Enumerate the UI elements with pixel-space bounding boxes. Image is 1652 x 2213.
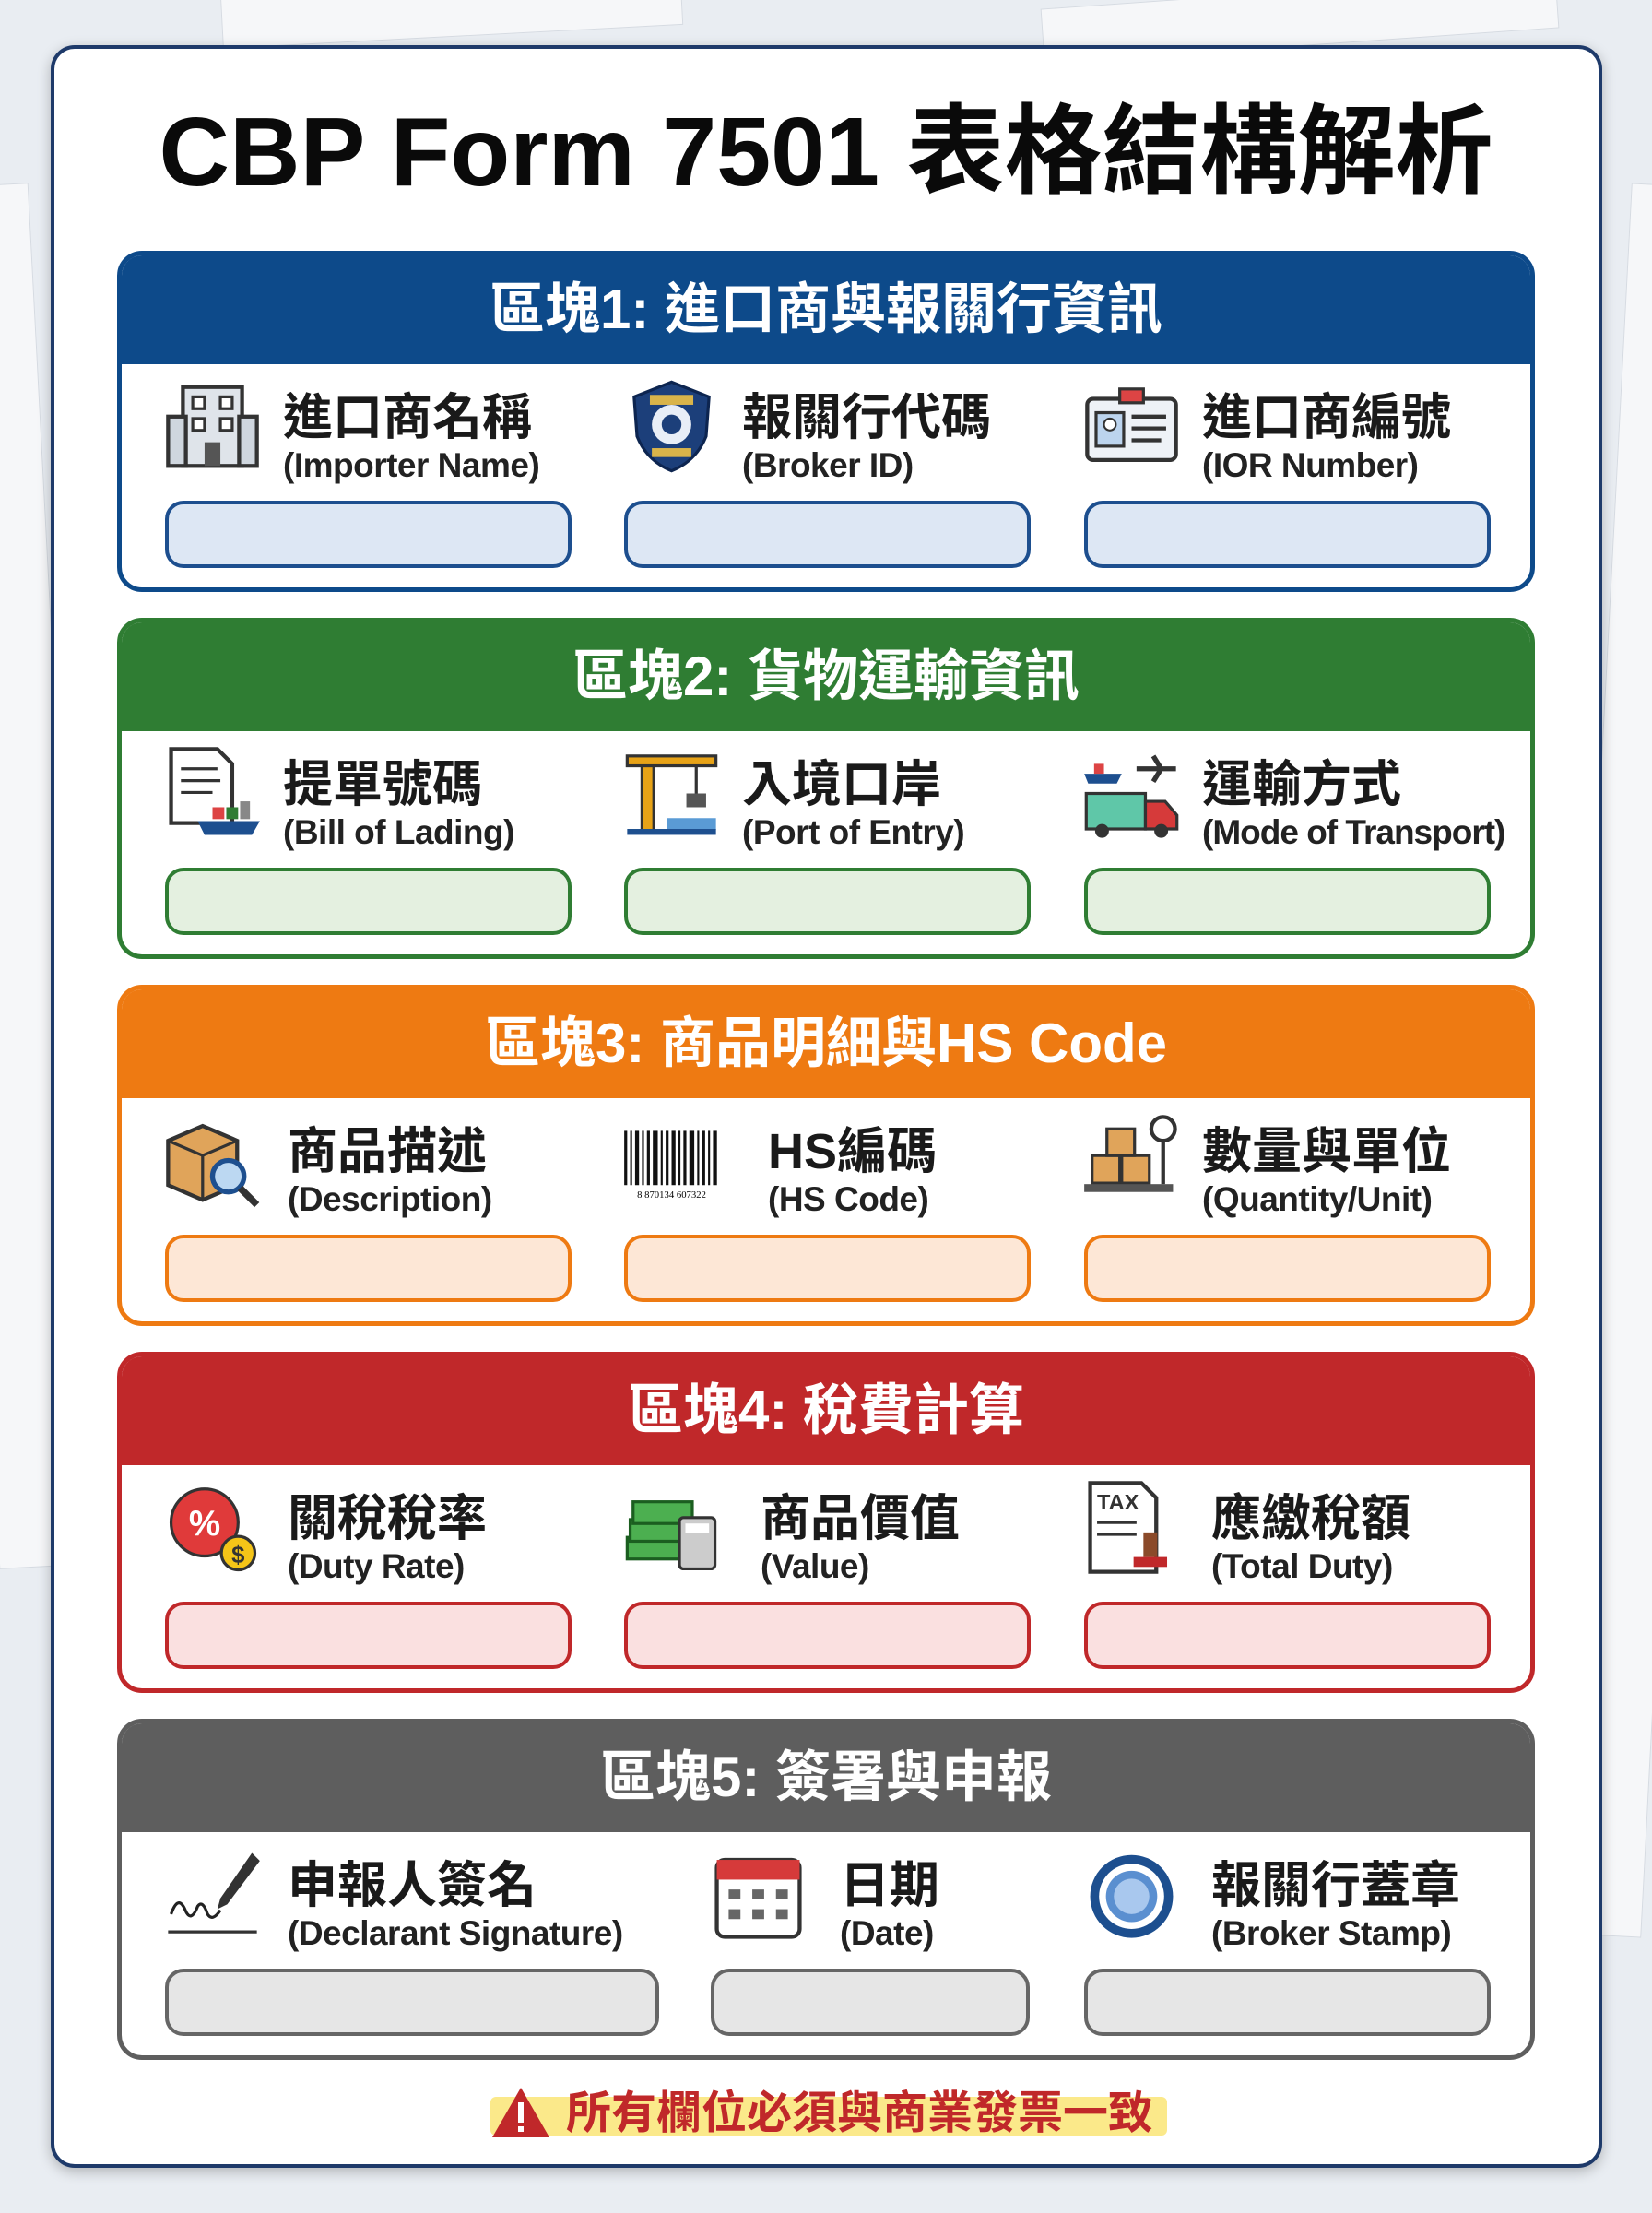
field: port of entry	[624, 754, 1031, 935]
heading: block 2: 區塊2: 貨物運輸資訊	[572, 645, 1080, 707]
panel: block 2 shipping	[117, 618, 1535, 959]
field: declarant signature	[165, 1853, 659, 2036]
field: value: (Value)	[761, 1547, 869, 1585]
field: total duty: (Total Duty)	[1211, 1547, 1393, 1585]
field: description: 商品描述	[288, 1124, 487, 1179]
field: description: (Description)	[288, 1180, 492, 1218]
heading: block 5: 區塊5: 簽署與申報	[600, 1746, 1052, 1808]
field: HS code	[624, 1124, 1031, 1302]
field: duty rate: (Duty Rate)	[288, 1547, 465, 1585]
field: date	[711, 1857, 1030, 2036]
field: total duty: 應繳稅額	[1211, 1491, 1410, 1546]
heading: block 4	[122, 1356, 1530, 1465]
field: value: 商品價值	[761, 1491, 960, 1546]
field: mode of transport: 運輸方式	[1202, 757, 1401, 812]
icon: percent badge	[170, 1487, 256, 1571]
heading: block 1	[122, 255, 1530, 364]
field: port of entry: (Port of Entry)	[742, 813, 964, 851]
title: CBP Form 7501 表格結構解析	[159, 98, 1493, 207]
icon: box with magnifier	[166, 1123, 260, 1208]
field: broker stamp: (Broker Stamp)	[1211, 1914, 1451, 1952]
icon: tax document and stamp: TAX	[1097, 1490, 1139, 1514]
icon: stamp seal	[1090, 1855, 1173, 1938]
heading: block 3	[122, 989, 1530, 1098]
field: mode of transport	[1084, 754, 1504, 935]
field: date: (Date)	[840, 1914, 934, 1952]
panel: block 4 duty	[117, 1352, 1535, 1693]
heading: block 2	[122, 622, 1530, 731]
field: broker stamp: 報關行蓋章	[1211, 1858, 1460, 1913]
heading: block 3: 區塊3: 商品明細與HS Code	[485, 1012, 1167, 1074]
icon: document with ship	[169, 747, 260, 835]
icon: building	[166, 385, 259, 468]
field: broker ID: (Broker ID)	[742, 446, 914, 484]
field: importer name	[165, 385, 572, 568]
field: broker ID	[624, 380, 1031, 568]
field: mode of transport: (Mode of Transport)	[1202, 813, 1504, 851]
field: port of entry: 入境口岸	[742, 757, 941, 812]
field: value	[624, 1491, 1031, 1669]
callout: footer warning: 所有欄位必須與商業發票一致	[566, 2089, 1153, 2138]
panel: block 1 importer & broker	[117, 251, 1535, 592]
field: HS code: (HS Code)	[768, 1180, 928, 1218]
field: broker ID: 報關行代碼	[742, 390, 991, 445]
heading: block 4: 區塊4: 稅費計算	[628, 1379, 1024, 1441]
icon: percent badge: $	[231, 1543, 244, 1568]
field: duty rate	[165, 1487, 572, 1669]
icon: badge	[632, 380, 711, 472]
icon: money and calculator	[625, 1500, 717, 1570]
field: HS code: HS編碼	[768, 1124, 937, 1179]
field: importer name: (Importer Name)	[283, 446, 539, 484]
field: quantity unit: 數量與單位	[1202, 1124, 1451, 1179]
heading: block 1: 區塊1: 進口商與報關行資訊	[490, 278, 1162, 340]
heading: block 5	[122, 1723, 1530, 1832]
field: description	[165, 1123, 572, 1302]
field: bill of lading: 提單號碼	[283, 757, 482, 812]
field: declarant signature: 申報人簽名	[288, 1858, 537, 1913]
panel: block 3 goods	[117, 985, 1535, 1326]
icon: barcode	[624, 1130, 717, 1201]
panel: block 5 signature	[117, 1719, 1535, 2060]
field: broker stamp	[1084, 1855, 1491, 2036]
icon: crane	[625, 754, 717, 835]
field: declarant signature: (Declarant Signature)	[288, 1914, 623, 1952]
field: IOR number: 進口商編號	[1202, 390, 1451, 445]
field: duty rate: 關稅稅率	[288, 1491, 487, 1546]
icon: barcode: 8 870134 607322	[637, 1189, 706, 1201]
field: quantity unit: (Quantity/Unit)	[1202, 1180, 1432, 1218]
icon: tax document and stamp	[1088, 1481, 1167, 1574]
icon: ID card	[1085, 387, 1178, 462]
icon: calendar	[714, 1857, 802, 1939]
field: bill of lading	[165, 747, 572, 935]
field: total duty	[1084, 1481, 1491, 1669]
icon: percent badge: %	[189, 1504, 220, 1544]
icon: boxes on scale	[1084, 1115, 1177, 1192]
icon: warning triangle	[492, 2088, 549, 2137]
icon: truck, ship, plane	[1084, 754, 1178, 838]
icon: pen signature	[168, 1853, 260, 1934]
field: importer name: 進口商名稱	[283, 390, 532, 445]
field: IOR number	[1084, 387, 1491, 568]
field: IOR number: (IOR Number)	[1202, 446, 1418, 484]
field: quantity unit	[1084, 1115, 1491, 1302]
field: date: 日期	[840, 1858, 939, 1913]
field: bill of lading: (Bill of Lading)	[283, 813, 514, 851]
